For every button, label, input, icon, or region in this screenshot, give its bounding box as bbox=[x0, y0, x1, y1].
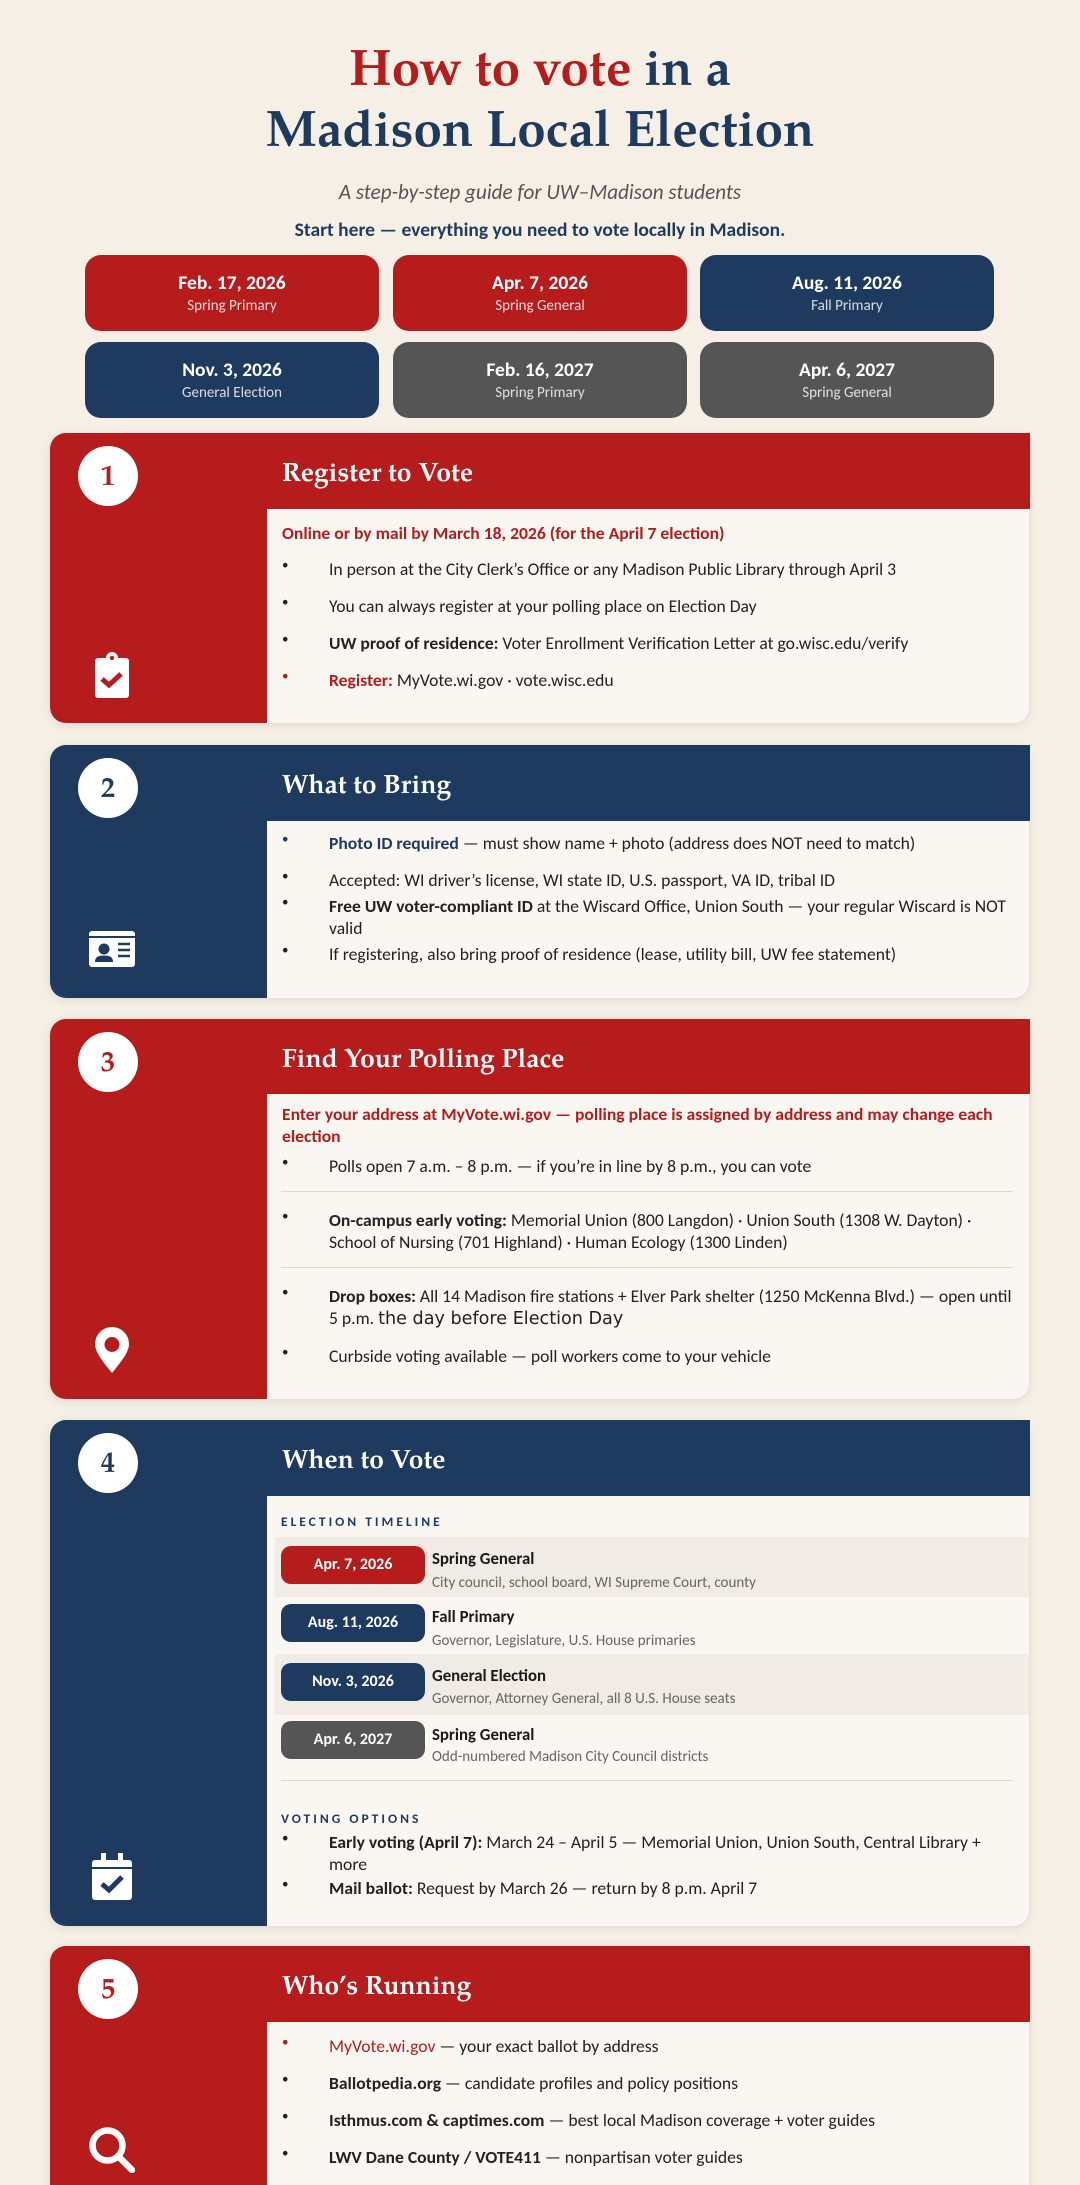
date box: Apr. 6, 2027: Spring General bbox=[802, 384, 892, 402]
icon: calendar bbox=[92, 1853, 132, 1900]
bullet list: • bbox=[282, 895, 288, 910]
callout: enter your address bbox=[282, 1103, 993, 1147]
step number 1: 1 bbox=[101, 465, 115, 493]
bullet list: • bbox=[282, 595, 288, 610]
date box: Nov. 3, 2026: General Election bbox=[182, 384, 282, 402]
date box: Aug. 11, 2026: Aug. 11, 2026 bbox=[792, 270, 902, 294]
heading: when to vote: When to Vote bbox=[282, 1449, 445, 1475]
heading: who's running: Who’s Running bbox=[282, 1975, 471, 2001]
bullet list: Free UW voter-compliant ID at the Wiscard Office, Union South — your regular Wiscard is NOT bbox=[329, 895, 1006, 917]
bullet list: • bbox=[282, 1285, 288, 1300]
date box: Nov. 3, 2026: Nov. 3, 2026 bbox=[182, 358, 282, 382]
bullet list: If registering, also bring proof of residence (lease, utility bill, UW fee statement) bbox=[329, 943, 896, 965]
heading: find your polling place: Find Your Polling Place bbox=[282, 1048, 564, 1074]
date box: Feb. 16, 2027: Spring Primary bbox=[495, 384, 585, 402]
bullet list: • bbox=[282, 1209, 288, 1224]
step number 3: 3 bbox=[101, 1051, 115, 1079]
step number 2: 2 bbox=[101, 777, 115, 805]
bullet list bbox=[282, 2035, 875, 2168]
bullet list: Mail ballot: Request by March 26 — return by 8 p.m. April 7 bbox=[329, 1877, 757, 1899]
bullet list: • bbox=[282, 669, 288, 684]
date box: Feb. 17, 2026: Spring Primary bbox=[187, 297, 277, 315]
timeline row: Nov. 3, 2026: Nov. 3, 2026 bbox=[312, 1672, 394, 1691]
timeline row: Aug. 11, 2026 bbox=[281, 1604, 695, 1650]
bullet list: 5 p.m. the day before Election Day bbox=[329, 1307, 623, 1329]
timeline row: Apr. 7, 2026: Apr. 7, 2026 bbox=[314, 1555, 392, 1574]
bullet list: UW proof of residence: Voter Enrollment Verification Letter at go.wisc.edu/verify bbox=[329, 632, 908, 654]
bullet list: Photo ID required — must show name + photo (address does NOT need to match) bbox=[329, 832, 915, 854]
label: election timeline: ELECTION TIMELINE bbox=[281, 1513, 443, 1530]
date box: Nov. 3, 2026 bbox=[85, 342, 379, 418]
bullet list: • bbox=[282, 2072, 288, 2087]
date box: Feb. 17, 2026 bbox=[85, 255, 379, 331]
bullet list: Ballotpedia.org — candidate profiles and policy positions bbox=[329, 2072, 738, 2094]
bullet list bbox=[281, 1155, 1012, 1367]
panel: step 2 what to bring bbox=[50, 745, 1029, 998]
timeline row: Aug. 11, 2026: Fall Primary bbox=[432, 1606, 515, 1627]
timeline row: Apr. 6, 2027 bbox=[281, 1721, 708, 1766]
title: Madison Local Election bbox=[266, 110, 814, 160]
bullet list: Register: MyVote.wi.gov · vote.wisc.edu bbox=[329, 669, 614, 691]
timeline row: Nov. 3, 2026 bbox=[281, 1663, 735, 1708]
step number 3 bbox=[78, 1032, 138, 1092]
panel: step 3 find your polling place bbox=[50, 1019, 1029, 1399]
timeline row: Apr. 6, 2027: Odd-numbered Madison City Council districts bbox=[432, 1748, 708, 1766]
step number 4: 4 bbox=[101, 1452, 115, 1480]
heading: register to vote: Register to Vote bbox=[282, 462, 473, 488]
timeline row: Apr. 7, 2026 bbox=[281, 1546, 756, 1592]
timeline row: Aug. 11, 2026: Aug. 11, 2026 bbox=[308, 1613, 398, 1632]
bullet list: Curbside voting available — poll workers come to your vehicle bbox=[329, 1345, 771, 1367]
date box: Feb. 16, 2027: Feb. 16, 2027 bbox=[486, 358, 594, 382]
bullet list: School of Nursing (701 Highland) · Human Ecology (1300 Linden) bbox=[329, 1231, 788, 1253]
panel: step 4 when to vote bbox=[50, 1420, 1029, 1926]
bullet list: • bbox=[282, 1831, 288, 1846]
icon: magnifying glass bbox=[89, 2127, 135, 2173]
bullet list: You can always register at your polling place on Election Day bbox=[329, 595, 757, 617]
timeline row: Apr. 6, 2027: Spring General bbox=[432, 1724, 534, 1745]
bullet list: • bbox=[282, 943, 288, 958]
step number 5: 5 bbox=[101, 1978, 115, 2006]
date box: Feb. 16, 2027 bbox=[393, 342, 687, 418]
step number 1 bbox=[78, 446, 138, 506]
bullet list: In person at the City Clerk’s Office or any Madison Public Library through April 3 bbox=[329, 558, 896, 580]
step number 4 bbox=[78, 1433, 138, 1493]
bullet list: Accepted: WI driver’s license, WI state ID, U.S. passport, VA ID, tribal ID bbox=[329, 869, 835, 891]
callout: enter your address: Enter your address at MyVote.wi.gov — polling place is assigned by address and may change each bbox=[282, 1103, 993, 1125]
bullet list: Early voting (April 7): March 24 – April 5 — Memorial Union, Union South, Central Library + bbox=[329, 1831, 981, 1853]
panel: step 5 who's running bbox=[50, 1946, 1029, 2185]
timeline row: Nov. 3, 2026: Governor, Attorney General, all 8 U.S. House seats bbox=[432, 1690, 735, 1708]
bullet list: Drop boxes: All 14 Madison fire stations + Elver Park shelter (1250 McKenna Blvd.) — open until bbox=[329, 1285, 1011, 1307]
bullet list: • bbox=[282, 2035, 288, 2050]
bullet list bbox=[282, 558, 908, 691]
timeline row: Nov. 3, 2026: General Election bbox=[432, 1665, 546, 1686]
timeline row: Apr. 7, 2026: Spring General bbox=[432, 1548, 534, 1569]
bullet list: • bbox=[282, 2109, 288, 2124]
date box: Apr. 6, 2027: Apr. 6, 2027 bbox=[799, 358, 895, 382]
timeline row: Apr. 6, 2027: Apr. 6, 2027 bbox=[314, 1730, 392, 1749]
chart: election timeline bbox=[275, 1537, 1029, 1766]
icon: map pin bbox=[95, 1327, 129, 1373]
heading: what to bring: What to Bring bbox=[282, 774, 451, 800]
bullet list: LWV Dane County / VOTE411 — nonpartisan voter guides bbox=[329, 2146, 743, 2168]
bullet list: more bbox=[329, 1853, 367, 1875]
bullet list: Isthmus.com & captimes.com — best local Madison coverage + voter guides bbox=[329, 2109, 875, 2131]
bullet list: On-campus early voting: Memorial Union (800 Langdon) · Union South (1308 W. Dayton) · bbox=[329, 1209, 971, 1231]
title bbox=[266, 49, 814, 160]
icon: clipboard bbox=[95, 652, 129, 698]
step number 5 bbox=[78, 1959, 138, 2019]
bullet list: • bbox=[282, 869, 288, 884]
date box: Apr. 7, 2026: Spring General bbox=[495, 297, 585, 315]
bullet list: • bbox=[282, 1345, 288, 1360]
panel: step 1 register to vote bbox=[50, 433, 1029, 723]
callout: deadline: Online or by mail by March 18, 2026 (for the April 7 election) bbox=[282, 522, 725, 544]
bullet list: • bbox=[282, 558, 288, 573]
bullet list: • bbox=[282, 2146, 288, 2161]
intro line: Start here — everything you need to vote locally in Madison. bbox=[295, 218, 785, 242]
date box: Aug. 11, 2026: Fall Primary bbox=[811, 297, 883, 315]
timeline row: Apr. 7, 2026: City council, school board, WI Supreme Court, county bbox=[432, 1574, 756, 1592]
bullet list: • bbox=[282, 1155, 288, 1170]
icon: id card bbox=[89, 931, 135, 967]
bullet list: • bbox=[282, 632, 288, 647]
callout: enter your address: election bbox=[282, 1125, 341, 1147]
date box: Feb. 17, 2026: Feb. 17, 2026 bbox=[178, 270, 286, 294]
step number 2 bbox=[78, 758, 138, 818]
bullet list: • bbox=[282, 1877, 288, 1892]
bullet list bbox=[282, 1831, 981, 1899]
date box: Apr. 7, 2026: Apr. 7, 2026 bbox=[492, 270, 588, 294]
date box: Apr. 6, 2027 bbox=[700, 342, 994, 418]
date box: Aug. 11, 2026 bbox=[700, 255, 994, 331]
bullet list: • bbox=[282, 832, 288, 847]
bullet list: Polls open 7 a.m. – 8 p.m. — if you’re in line by 8 p.m., you can vote bbox=[329, 1155, 811, 1177]
title: How to vote in a bbox=[349, 49, 731, 99]
date box: Apr. 7, 2026 bbox=[393, 255, 687, 331]
subtitle: A step-by-step guide for UW–Madison students bbox=[339, 179, 741, 205]
bullet list: valid bbox=[329, 917, 362, 939]
bullet list: MyVote.wi.gov — your exact ballot by address bbox=[329, 2035, 659, 2057]
bullet list bbox=[282, 832, 1006, 965]
label: voting options: VOTING OPTIONS bbox=[281, 1810, 421, 1827]
timeline row: Aug. 11, 2026: Governor, Legislature, U.S. House primaries bbox=[432, 1632, 695, 1650]
